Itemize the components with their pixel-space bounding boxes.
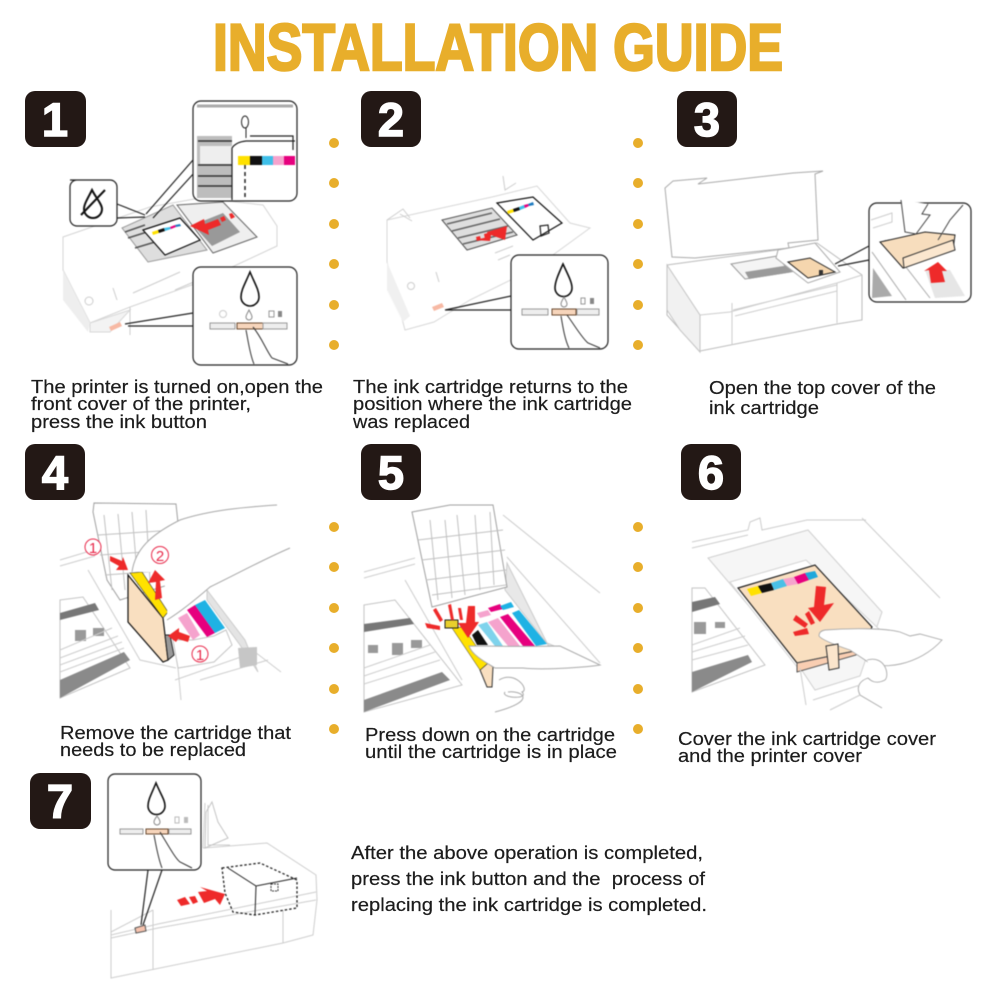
instruction text: step 3: ink cartridge: [709, 397, 819, 418]
badge: step 3: 3: [694, 93, 720, 146]
panel: step 7: [30, 773, 707, 978]
instruction text: step 5: until the cartridge is in place: [365, 741, 617, 762]
instruction text: step 2: was replaced: [352, 411, 470, 432]
panel: step 6: [678, 444, 942, 766]
badge: step 2: [361, 91, 421, 147]
panel: step 1: [25, 91, 323, 432]
badge: step 4: 4: [42, 446, 68, 499]
instruction text: step 6: Cover the ink cartridge cover: [678, 728, 936, 749]
panel: step 2: [352, 91, 632, 432]
panel: step 4: [25, 444, 291, 760]
badge: step 1: [25, 91, 86, 147]
instruction text: step 5: Press down on the cartridge: [365, 724, 615, 745]
panel: step 3: [665, 91, 971, 418]
instruction text: step 4: Remove the cartridge that: [60, 722, 291, 743]
badge: step 3: [677, 91, 737, 147]
instruction text: step 3: [709, 377, 936, 418]
illustration: pressing cartridge in place: [364, 505, 600, 712]
badge: step 4: [25, 444, 85, 500]
illustration: removing the cartridge: 1: [89, 540, 97, 557]
instruction text: step 6: and the printer cover: [678, 745, 862, 766]
instruction text: step 2: The ink cartridge returns to the: [353, 376, 628, 397]
instruction text: step 7: replacing the ink cartridge is completed.: [351, 894, 707, 915]
badge: step 5: 5: [378, 446, 404, 499]
illustration: removing the cartridge: 2: [156, 548, 164, 565]
decorative dot column: row 1 right: [633, 138, 643, 350]
badge: step 2: 2: [378, 93, 404, 146]
instruction text: step 1: [31, 376, 323, 432]
instruction text: step 1: front cover of the printer,: [31, 393, 251, 414]
badge: step 7: 7: [47, 775, 73, 828]
illustration: removing the cartridge: 1: [196, 647, 204, 664]
instruction text: step 7: After the above operation is completed,: [351, 842, 703, 863]
decorative dot column: row 1 left: [329, 138, 339, 350]
illustration: cartridge returns to replacement position: [387, 176, 608, 349]
decorative dot column: row 2 left: [329, 522, 339, 734]
instruction text: step 2: [352, 376, 632, 432]
instruction text: step 5: [365, 724, 617, 762]
instruction text: step 1: The printer is turned on,open the: [31, 376, 323, 397]
instruction text: step 7: press the ink button and the process of: [351, 868, 706, 889]
badge: step 6: [681, 444, 741, 500]
badge: step 1: 1: [42, 93, 68, 146]
badge: step 7: [30, 773, 91, 829]
illustration: covering the ink cartridge cover: [692, 518, 942, 710]
title: INSTALLATION GUIDE: [213, 10, 783, 84]
illustration: printer with open cover and ink button: [63, 101, 297, 365]
illustration: removing the cartridge: [60, 503, 290, 700]
illustration: pressing the ink button to finish: [108, 774, 317, 978]
instruction text: step 2: position where the ink cartridge: [353, 393, 632, 414]
instruction text: step 3: Open the top cover of the: [709, 377, 936, 398]
decorative dot column: row 2 right: [633, 522, 643, 734]
illustration: printer with open top cover: [665, 171, 971, 352]
instruction text: step 4: needs to be replaced: [60, 739, 246, 760]
badge: step 6: 6: [698, 446, 724, 499]
instruction text: step 1: press the ink button: [31, 411, 207, 432]
badge: step 5: [361, 444, 421, 500]
panel: step 5: [361, 444, 617, 762]
instruction text: step 7: [351, 842, 707, 915]
instruction text: step 6: [678, 728, 936, 766]
instruction text: step 4: [60, 722, 291, 760]
